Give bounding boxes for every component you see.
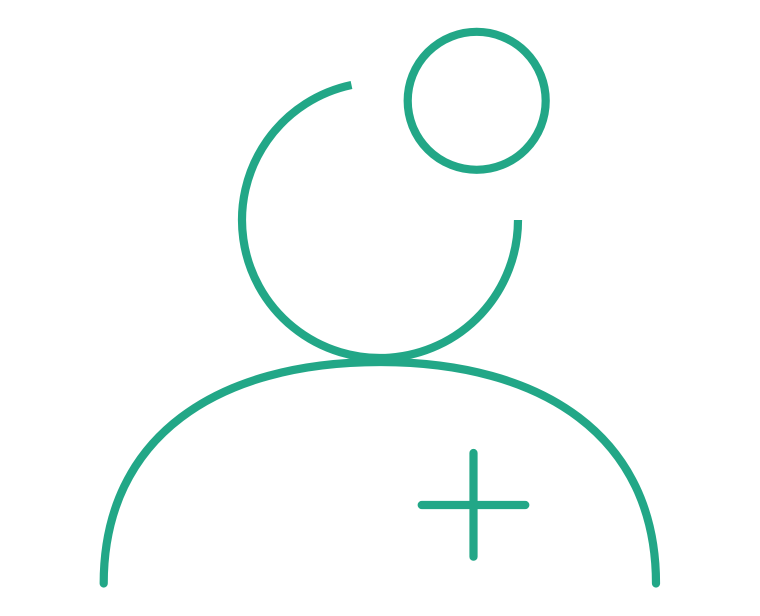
small circle (408, 32, 546, 170)
shoulders arc (104, 362, 656, 584)
plus sign (422, 453, 525, 557)
head arc (242, 85, 518, 358)
